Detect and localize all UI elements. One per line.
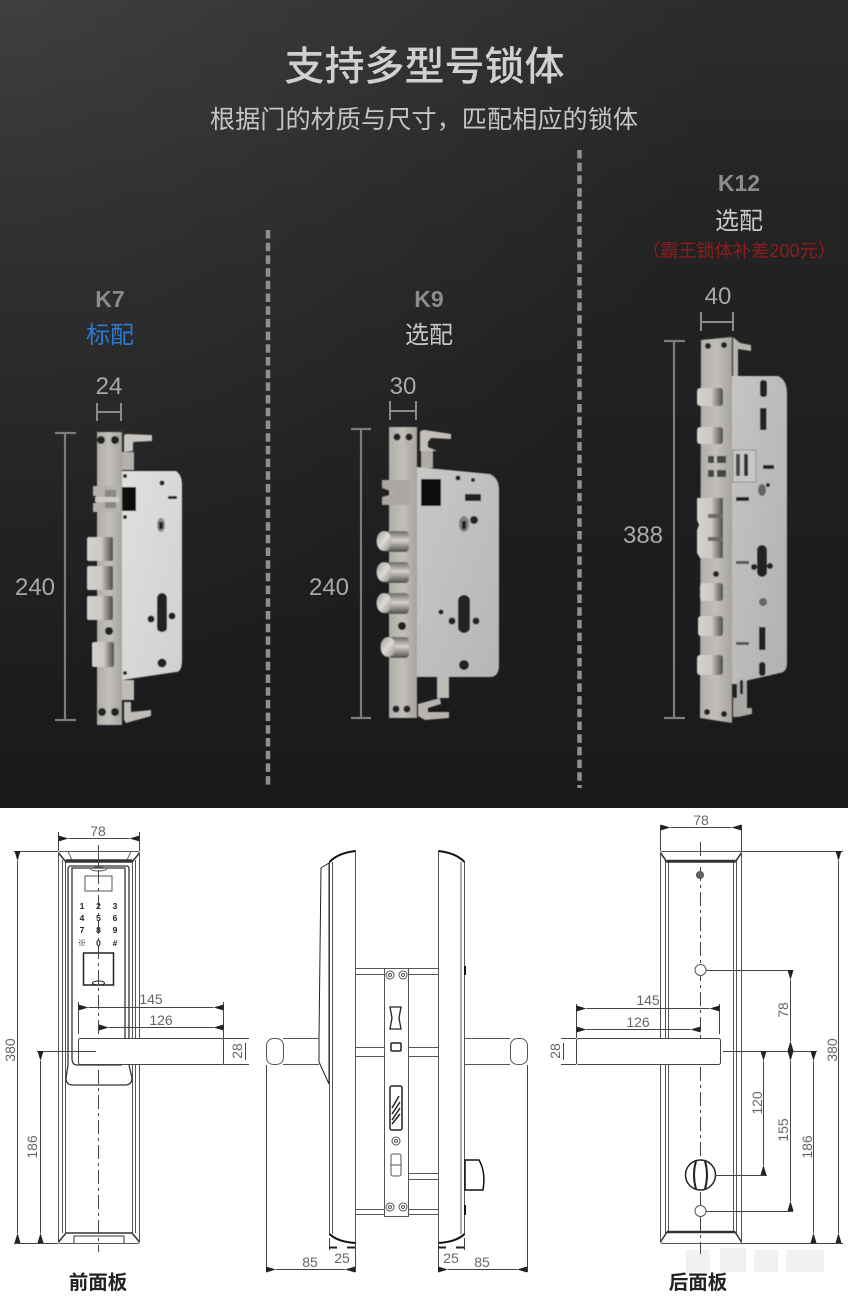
- K9 width dimension: 30: [390, 373, 416, 400]
- title: 支持多型号锁体: [284, 45, 564, 89]
- K7 height dimension: [15, 433, 76, 720]
- K7 standard label: 标配: [86, 322, 134, 349]
- rear dimension labels: 155: [775, 1118, 791, 1142]
- right handle: [464, 1038, 528, 1064]
- front panel caption: 前面板: [69, 1272, 128, 1294]
- keypad digits: 0: [96, 938, 101, 948]
- side dimension labels: 25: [334, 1250, 350, 1266]
- K9 width dimension: [390, 373, 416, 420]
- subtitle: 根据门的材质与尺寸，匹配相应的锁体: [210, 106, 638, 134]
- dashed divider right: [577, 150, 582, 788]
- top sensor slot: [90, 867, 106, 871]
- dimension labels: 145: [139, 991, 163, 1007]
- panel: K9 lock: [309, 286, 499, 720]
- panel: K12 lock: [623, 170, 836, 723]
- side dimensions: [266, 1065, 528, 1272]
- dimension labels: 126: [149, 1012, 173, 1028]
- left handle: [266, 1038, 319, 1064]
- keypad digits: 9: [113, 925, 118, 935]
- K7 height dimension: 240: [15, 574, 55, 601]
- K12 optional label: 选配: [715, 208, 763, 235]
- center line: [98, 845, 100, 1252]
- rear panel technical drawing: [547, 812, 843, 1254]
- rear screw and holes: [695, 872, 706, 1216]
- rear dimensions: [561, 825, 843, 1244]
- rear dimension labels: 145: [636, 992, 660, 1008]
- thumb turn knob: [686, 1160, 716, 1190]
- side dimension labels: [302, 1250, 490, 1270]
- keypad digits: 5: [96, 913, 101, 923]
- rear dimension labels: 126: [626, 1014, 650, 1030]
- center line: [700, 842, 702, 1254]
- smart lock face with handle rose: [66, 866, 132, 1085]
- rear dimension labels: [547, 812, 840, 1159]
- K9 heading: K9: [414, 286, 444, 312]
- K12 height dimension: 388: [623, 522, 663, 549]
- dimensions: [14, 832, 249, 1244]
- rear panel caption: 后面板: [669, 1272, 728, 1294]
- keypad digits: 4: [80, 913, 85, 923]
- side view technical drawing: [266, 851, 528, 1272]
- lever handle: [78, 1038, 224, 1064]
- left panel side: [330, 851, 356, 1243]
- rear dimension labels: 120: [749, 1091, 765, 1115]
- K12 width dimension: [701, 283, 733, 331]
- K9 optional label: 选配: [405, 322, 453, 349]
- rear dimension labels: 78: [693, 812, 709, 828]
- K9 height dimension: [309, 429, 371, 718]
- display window: [85, 876, 112, 891]
- keypad digits: ※: [78, 938, 86, 948]
- K7 heading: K7: [95, 286, 125, 312]
- rear dimension labels: 78: [775, 1002, 791, 1018]
- dimension labels: 380: [2, 1038, 18, 1062]
- K12 width dimension: 40: [705, 283, 731, 310]
- keypad digits: #: [113, 938, 118, 948]
- K7 width dimension: 24: [96, 373, 122, 400]
- dimension labels: [2, 823, 245, 1159]
- panel: white technical drawings: [0, 808, 848, 1297]
- front plate outline: [58, 852, 140, 1244]
- keypad digits: 7: [80, 925, 85, 935]
- keypad digits: [78, 901, 118, 948]
- K12 heading: K12: [718, 170, 760, 196]
- center lock plate: [384, 968, 408, 1216]
- dimension labels: 186: [24, 1135, 40, 1159]
- keypad digits: 8: [96, 925, 101, 935]
- rear lever handle: [576, 1038, 720, 1064]
- K12 height dimension: [623, 341, 685, 718]
- K7 lock body illustration: [87, 432, 182, 725]
- keypad digits: 1: [80, 901, 85, 911]
- dimension labels: 28: [229, 1043, 245, 1059]
- fingerprint reader: [84, 953, 114, 985]
- keypad digits: 6: [113, 913, 118, 923]
- K9 height dimension: 240: [309, 574, 349, 601]
- side bumps: [464, 966, 466, 1215]
- side dimension labels: 85: [474, 1254, 490, 1270]
- panel: K7 lock: [15, 286, 182, 725]
- side dimension labels: 85: [302, 1254, 318, 1270]
- K12 upgrade price note: （霸王锁体补差200元）: [642, 241, 836, 261]
- keypad digits: 2: [96, 901, 101, 911]
- right panel side: [438, 851, 464, 1243]
- mounting rails: [355, 968, 438, 1214]
- side dimension labels: 25: [443, 1250, 459, 1266]
- left front bump: [319, 863, 329, 1084]
- K7 width dimension: [96, 373, 122, 421]
- rear dimension labels: 28: [547, 1043, 563, 1059]
- rear dimension labels: 380: [824, 1038, 840, 1062]
- dark background panel: [0, 0, 848, 808]
- rear dimension labels: 186: [799, 1135, 815, 1159]
- dashed divider left: [266, 230, 270, 788]
- keypad digits: 3: [113, 901, 118, 911]
- K12 lock body illustration: [697, 337, 787, 723]
- dimension labels: 78: [90, 823, 106, 839]
- rear plate outline: [660, 852, 742, 1244]
- thumb turn: [465, 1160, 484, 1190]
- front panel technical drawing: [2, 823, 249, 1252]
- K9 lock body illustration: [376, 427, 499, 720]
